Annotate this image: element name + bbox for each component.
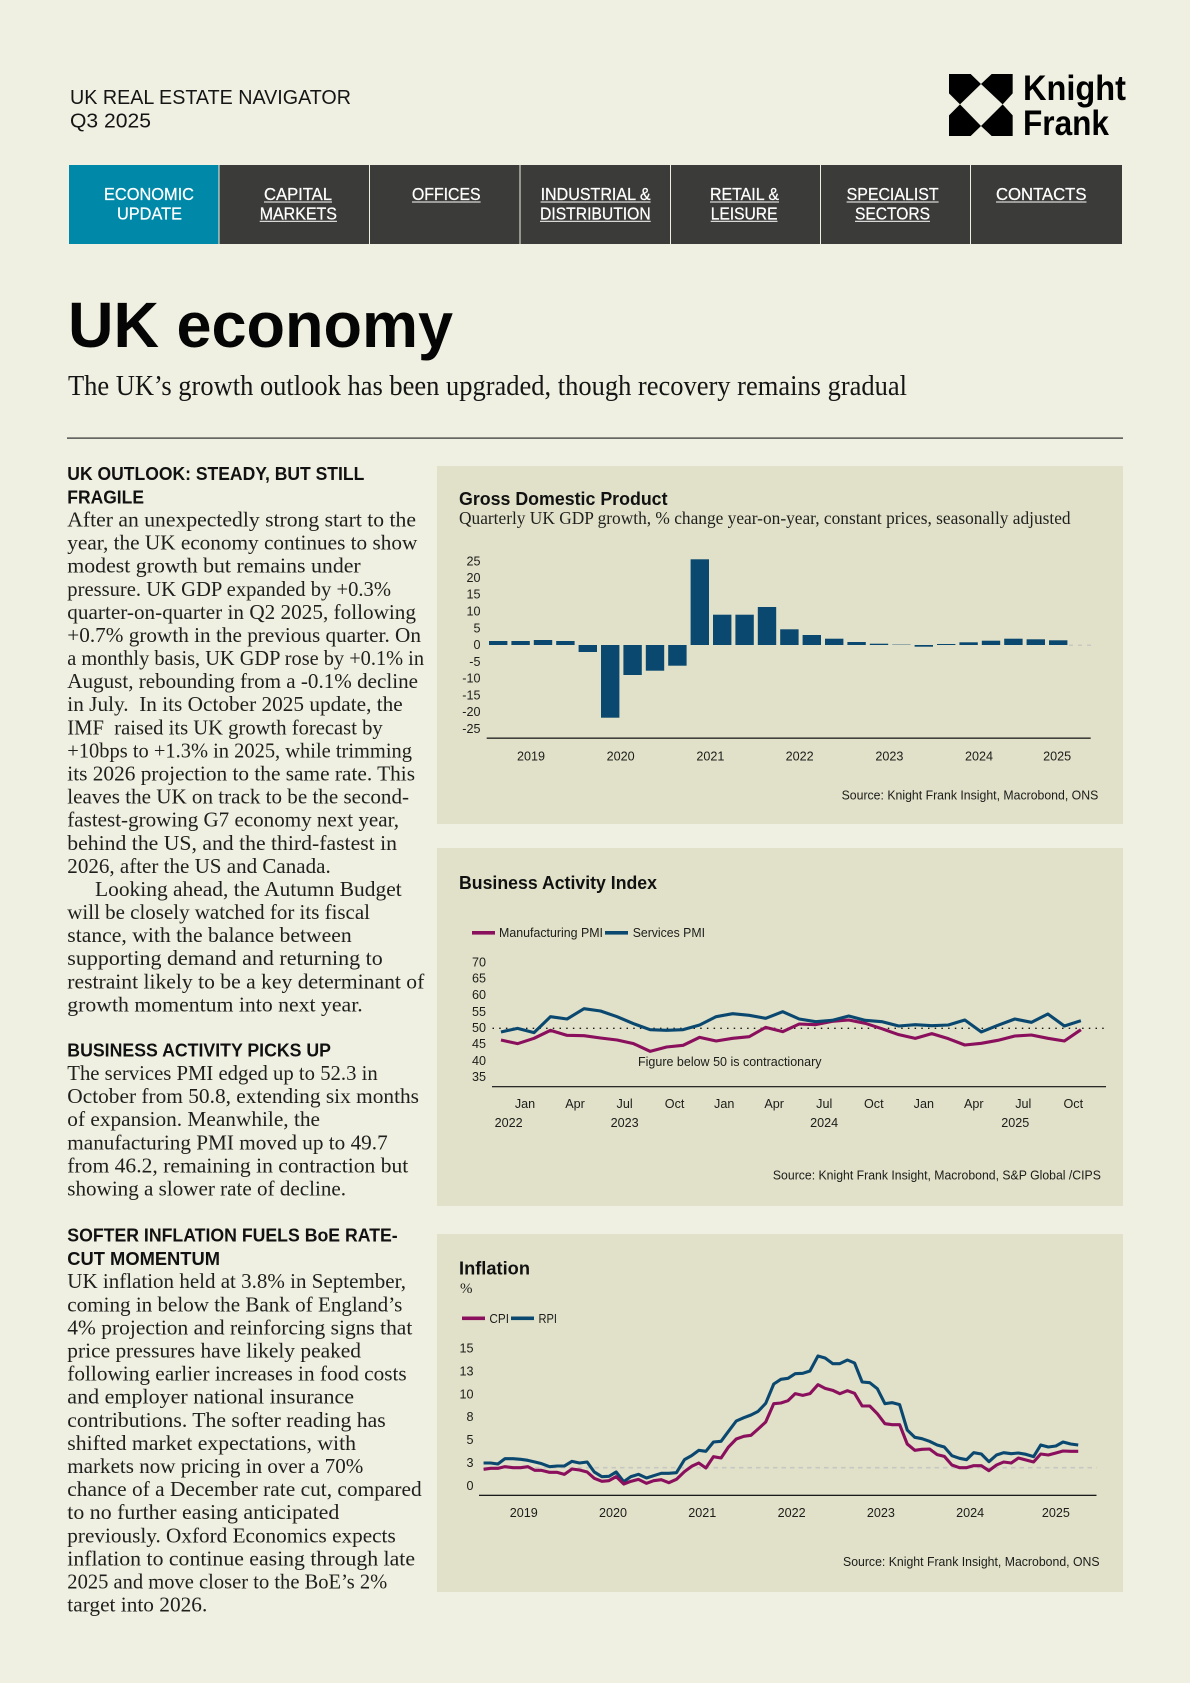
nav tab: retail and leisure <box>671 165 820 244</box>
x axis labels: PMI: Apr <box>764 1097 784 1111</box>
body text: UK outlook: +10bps to +1.3% in 2025, while trimming <box>67 738 412 762</box>
legend: PMI: Services PMI <box>633 926 705 940</box>
line chart: manufacturing PMI <box>501 1020 1081 1051</box>
x axis labels: GDP: 2023 <box>875 749 903 763</box>
y axis labels: GDP <box>462 554 480 736</box>
nav tab: industrial and distribution: DISTRIBUTION <box>540 203 651 223</box>
legend: PMI: Manufacturing PMI <box>499 926 603 940</box>
y axis labels: inflation: 0 <box>466 1479 474 1493</box>
body text: UK outlook: a monthly basis, UK GDP rose by +0.1% in <box>67 646 424 670</box>
heading: UK outlook: UK OUTLOOK: STEADY, BUT STILL <box>67 464 364 484</box>
body text: UK outlook: 2026, after the US and Canada. <box>67 854 331 878</box>
body text: UK outlook: quarter-on-quarter in Q2 2025, following <box>67 600 416 624</box>
y axis labels: GDP: 0 <box>473 638 480 652</box>
nav tab: specialist sectors: SECTORS <box>855 203 930 223</box>
heading: UK outlook <box>67 464 364 507</box>
y axis labels: GDP: -5 <box>469 655 480 669</box>
x axis labels: inflation: 2025 <box>1042 1506 1070 1520</box>
y axis labels: GDP: 20 <box>466 571 480 585</box>
body text: UK outlook: Looking ahead, the Autumn Budget <box>95 877 402 901</box>
body text: UK outlook: pressure. UK GDP expanded by +0.3% <box>67 577 391 601</box>
y axis labels: PMI <box>472 956 486 1084</box>
y axis labels: GDP: 10 <box>466 604 480 618</box>
panel: gross domestic product <box>437 466 1123 824</box>
y axis labels: GDP: -25 <box>462 722 480 736</box>
x axis labels: GDP: 2024 <box>965 749 993 763</box>
body text: business activity: showing a slower rate of decline. <box>67 1176 346 1200</box>
y axis labels: GDP: -20 <box>462 705 480 719</box>
x axis labels: PMI: Jul <box>1015 1097 1031 1111</box>
report header label <box>70 86 351 132</box>
heading: business activity: BUSINESS ACTIVITY PICKS UP <box>67 1041 331 1061</box>
body text: UK outlook: its 2026 projection to the same rate. This <box>67 762 415 786</box>
nav tab: capital markets: MARKETS <box>260 203 337 223</box>
x axis labels: inflation: 2024 <box>956 1506 984 1520</box>
x axis labels: inflation: 2021 <box>688 1506 716 1520</box>
x axis labels: inflation: 2019 <box>510 1506 538 1520</box>
nav tab: economic update <box>69 165 218 244</box>
body text: UK outlook: restraint likely to be a key determinant of <box>67 969 425 993</box>
heading: inflation: SOFTER INFLATION FUELS BoE RATE- <box>67 1226 398 1246</box>
body text: inflation: 4% projection and reinforcing signs that <box>67 1315 412 1339</box>
body text: UK outlook: leaves the UK on track to be the second- <box>67 785 409 809</box>
x axis labels: PMI: Oct <box>1064 1097 1084 1111</box>
nav tab: offices: OFFICES <box>412 184 481 204</box>
nav tab: capital markets <box>220 165 369 244</box>
body text: UK outlook: growth momentum into next year. <box>67 992 363 1016</box>
body text: inflation: coming in below the Bank of England’s <box>67 1292 402 1316</box>
body text: inflation: inflation to continue easing through late <box>67 1546 415 1570</box>
legend: inflation: CPI <box>489 1312 509 1326</box>
y axis labels: inflation <box>459 1342 474 1493</box>
text column section: UK outlook <box>67 464 425 1016</box>
x axis labels: PMI: Jan <box>714 1097 734 1111</box>
body text: inflation: markets now pricing in over a 70% <box>67 1454 363 1478</box>
nav tab: contacts: CONTACTS <box>996 184 1086 204</box>
body text: inflation: contributions. The softer reading has <box>67 1408 386 1432</box>
y axis labels: GDP: -15 <box>462 688 480 702</box>
body text: UK outlook: year, the UK economy continues to show <box>67 531 418 555</box>
y axis labels: GDP: -10 <box>462 672 480 686</box>
body text: UK outlook: +0.7% growth in the previous quarter. On <box>67 623 421 647</box>
report header label: UK REAL ESTATE NAVIGATOR <box>70 86 351 109</box>
x axis labels: PMI: Oct <box>864 1097 884 1111</box>
y axis labels: PMI: 55 <box>472 1005 486 1019</box>
legend: PMI <box>472 926 705 940</box>
body text: business activity: from 46.2, remaining in contraction but <box>67 1153 408 1177</box>
y axis labels: inflation: 15 <box>459 1342 474 1356</box>
body text: UK outlook: After an unexpectedly strong start to the <box>67 508 416 532</box>
x axis labels: GDP: 2021 <box>696 749 724 763</box>
nav tab: industrial and distribution: INDUSTRIAL & <box>541 184 651 204</box>
line chart: services PMI <box>501 1009 1081 1033</box>
source note: GDP: Source: Knight Frank Insight, Macrobond, ONS <box>842 788 1098 802</box>
y axis labels: inflation: 5 <box>466 1433 474 1447</box>
x axis labels: GDP: 2025 <box>1043 749 1071 763</box>
body text: inflation: to no further easing anticipated <box>67 1500 340 1524</box>
x axis labels: GDP: 2022 <box>786 749 814 763</box>
nav tab: offices <box>370 165 520 244</box>
title: UK economy <box>68 289 453 361</box>
y axis labels: PMI: 60 <box>472 988 486 1002</box>
body text: UK outlook: will be closely watched for its fiscal <box>67 900 370 924</box>
body text: business activity: October from 50.8, extending six months <box>67 1084 419 1108</box>
body text: inflation: following earlier increases in food costs <box>67 1362 407 1386</box>
logo: Knight Frank: Knight <box>1023 69 1126 108</box>
y axis labels: PMI: 65 <box>472 972 486 986</box>
body text: inflation: 2025 and move closer to the BoE’s 2% <box>67 1570 387 1594</box>
chart subtitle: GDP: Quarterly UK GDP growth, % change year-on-year, constant prices, seasonally adjusted <box>459 508 1071 528</box>
body text: inflation: chance of a December rate cut, compared <box>67 1477 422 1501</box>
body text: business activity: The services PMI edged up to 52.3 in <box>67 1061 378 1085</box>
body text: inflation: previously. Oxford Economics expects <box>67 1523 396 1547</box>
heading: UK outlook: FRAGILE <box>67 487 144 507</box>
line chart: CPI <box>484 1385 1078 1484</box>
body text: UK outlook: in July. In its October 2025 update, the <box>67 692 403 716</box>
nav tab: economic update: ECONOMIC <box>104 184 194 204</box>
x axis labels: GDP: 2019 <box>517 749 545 763</box>
y axis labels: PMI: 40 <box>472 1054 486 1068</box>
body text: UK outlook <box>67 508 425 1016</box>
x axis labels: PMI: Apr <box>964 1097 984 1111</box>
y axis labels: GDP: 25 <box>466 554 480 568</box>
x axis labels: PMI: Jul <box>617 1097 633 1111</box>
x axis labels: PMI: 2023 <box>611 1116 639 1130</box>
navigation bar <box>69 165 1122 244</box>
source note: inflation: Source: Knight Frank Insight, Macrobond, ONS <box>843 1555 1100 1569</box>
chart unit: % <box>460 1281 472 1297</box>
x axis labels: PMI: 2022 <box>495 1116 523 1130</box>
body text: UK outlook: August, rebounding from a -0.1% decline <box>67 669 418 693</box>
body text: UK outlook: supporting demand and returning to <box>67 946 383 970</box>
y axis labels: inflation: 8 <box>466 1410 474 1424</box>
legend: inflation <box>462 1312 557 1326</box>
source note: PMI: Source: Knight Frank Insight, Macrobond, S&P Global /CIPS <box>773 1168 1101 1182</box>
body text: business activity: manufacturing PMI moved up to 49.7 <box>67 1130 388 1154</box>
x axis labels: inflation <box>510 1506 1070 1520</box>
x axis labels: GDP: 2020 <box>607 749 635 763</box>
y axis labels: inflation: 13 <box>459 1364 474 1378</box>
nav tab: contacts <box>971 165 1122 244</box>
x axis labels: PMI: Apr <box>565 1097 585 1111</box>
body text: inflation: target into 2026. <box>67 1593 207 1617</box>
nav tab: specialist sectors <box>821 165 970 244</box>
body text: UK outlook: IMF raised its UK growth forecast by <box>67 715 383 739</box>
chart title: inflation: Inflation <box>459 1258 530 1278</box>
y axis labels: PMI: 35 <box>472 1070 486 1084</box>
x axis labels: PMI: 2024 <box>810 1116 838 1130</box>
body text: inflation: UK inflation held at 3.8% in September, <box>67 1269 406 1293</box>
x axis labels: PMI: 2025 <box>1001 1116 1029 1130</box>
legend: inflation: RPI <box>538 1312 557 1326</box>
logo: Knight Frank: Frank <box>1023 104 1109 143</box>
heading: inflation <box>67 1226 398 1269</box>
text column section: business activity <box>67 1041 419 1200</box>
y axis labels: PMI: 50 <box>472 1021 486 1035</box>
body text: UK outlook: behind the US, and the third-fastest in <box>67 831 397 855</box>
panel: inflation <box>437 1234 1123 1592</box>
subtitle: The UK’s growth outlook has been upgraded, though recovery remains gradual <box>68 371 907 402</box>
body text: business activity: of expansion. Meanwhile, the <box>67 1107 320 1131</box>
nav tab: retail and leisure: LEISURE <box>711 203 778 223</box>
body text: inflation: and employer national insurance <box>67 1385 354 1409</box>
x axis labels: PMI: Jan <box>914 1097 934 1111</box>
y axis labels: PMI: 45 <box>472 1037 486 1051</box>
nav tab: economic update: UPDATE <box>117 203 182 223</box>
body text: UK outlook: modest growth but remains under <box>67 554 361 578</box>
line chart: RPI <box>484 1356 1078 1482</box>
nav tab: capital markets: CAPITAL <box>264 184 332 204</box>
x axis labels: inflation: 2023 <box>867 1506 895 1520</box>
nav tab: specialist sectors: SPECIALIST <box>847 184 939 204</box>
y axis labels: inflation: 10 <box>459 1388 474 1402</box>
x axis labels: PMI: Oct <box>665 1097 685 1111</box>
heading: inflation: CUT MOMENTUM <box>67 1249 220 1269</box>
y axis labels: GDP: 5 <box>473 621 480 635</box>
chart annotation: Figure below 50 is contractionary <box>638 1055 822 1069</box>
text column section: inflation <box>67 1226 422 1617</box>
panel: business activity index <box>437 848 1123 1206</box>
chart title: GDP: Gross Domestic Product <box>459 489 668 509</box>
body text: business activity <box>67 1061 419 1200</box>
logo: Knight Frank <box>949 69 1126 143</box>
x axis labels: GDP <box>517 749 1071 763</box>
y axis labels: inflation: 3 <box>466 1456 474 1470</box>
x axis labels: inflation: 2022 <box>778 1506 806 1520</box>
body text: UK outlook: stance, with the balance between <box>67 923 352 947</box>
body text: inflation <box>67 1269 422 1617</box>
y axis labels: GDP: 15 <box>466 588 480 602</box>
x axis labels: PMI: Jul <box>816 1097 832 1111</box>
bar chart: GDP growth <box>489 559 1067 718</box>
nav tab: industrial and distribution <box>520 165 670 244</box>
y axis labels: PMI: 70 <box>472 956 486 970</box>
x axis labels: PMI: Jan <box>515 1097 535 1111</box>
chart title: business activity: Business Activity Index <box>459 873 657 893</box>
body text: UK outlook: fastest-growing G7 economy next year, <box>67 808 399 832</box>
x axis labels: inflation: 2020 <box>599 1506 627 1520</box>
body text: inflation: shifted market expectations, with <box>67 1431 356 1455</box>
body text: inflation: price pressures have likely peaked <box>67 1338 361 1362</box>
x axis labels: PMI <box>495 1097 1084 1130</box>
report header label: Q3 2025 <box>70 109 151 132</box>
nav tab: retail and leisure: RETAIL & <box>710 184 779 204</box>
